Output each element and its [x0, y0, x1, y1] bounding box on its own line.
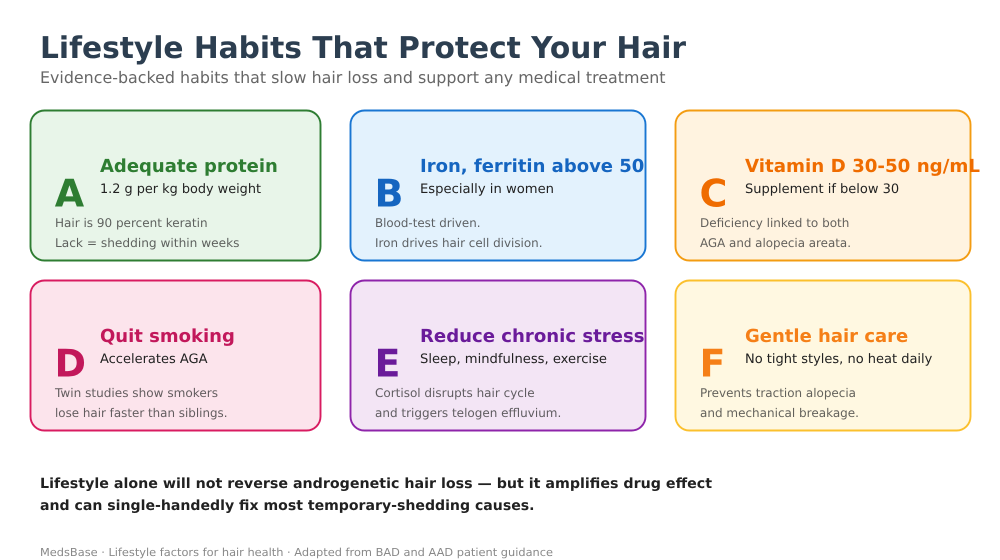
panel: D quit smoking: [30, 280, 320, 430]
panel: E reduce stress: Sleep, mindfulness, exercise: [420, 352, 607, 367]
panel: D quit smoking: Quit smoking: [100, 326, 235, 347]
panel: C vitamin D: AGA and alopecia areata.: [700, 236, 851, 250]
panel: F gentle hair care: [676, 280, 970, 430]
takeaway statement: [40, 476, 712, 514]
takeaway statement: and can single-handedly fix most temporary-shedding causes.: [40, 498, 534, 514]
panel: A adequate protein: [30, 110, 320, 260]
panel: B iron: Especially in women: [420, 182, 554, 197]
panel: A adequate protein: 1.2 g per kg body weight: [100, 182, 261, 197]
panel: E reduce stress: and triggers telogen effluvium.: [375, 406, 561, 420]
panel: E reduce stress: E: [374, 342, 400, 386]
panel: B iron: Iron, ferritin above 50: [420, 156, 644, 177]
panel: F gentle hair care: and mechanical breakage.: [700, 406, 859, 420]
panel: A adequate protein: Lack = shedding within weeks: [55, 236, 240, 250]
takeaway statement: Lifestyle alone will not reverse androgenetic hair loss — but it amplifies drug effect: [40, 476, 712, 492]
panel: E reduce stress: [350, 280, 646, 430]
panel: F gentle hair care: No tight styles, no heat daily: [745, 352, 933, 367]
panel: A adequate protein: A: [55, 172, 85, 216]
panel: C vitamin D: Supplement if below 30: [745, 182, 899, 197]
panel: F gentle hair care: Prevents traction alopecia: [700, 386, 856, 400]
panel: B iron: [350, 110, 646, 260]
subtitle: Evidence-backed habits that slow hair loss and support any medical treatment: [40, 68, 666, 87]
panel: D quit smoking: D: [54, 342, 86, 386]
panel: E reduce stress: Reduce chronic stress: [420, 326, 644, 347]
panel: A adequate protein: Adequate protein: [100, 156, 278, 177]
title: Lifestyle Habits That Protect Your Hair: [40, 31, 686, 66]
panel: B iron: B: [374, 172, 403, 216]
panel: C vitamin D: Deficiency linked to both: [700, 216, 849, 230]
panel: E reduce stress: Cortisol disrupts hair cycle: [375, 386, 535, 400]
panel: D quit smoking: Twin studies show smokers: [54, 386, 218, 400]
panel: C vitamin D: C: [700, 172, 727, 216]
panel: B iron: Blood-test driven.: [375, 216, 480, 230]
panel: D quit smoking: lose hair faster than siblings.: [55, 406, 228, 420]
panel: D quit smoking: Accelerates AGA: [100, 352, 208, 367]
panel: F gentle hair care: F: [700, 342, 725, 386]
panel: F gentle hair care: Gentle hair care: [745, 326, 908, 347]
panel: A adequate protein: Hair is 90 percent keratin: [55, 216, 208, 230]
footer source: MedsBase · Lifestyle factors for hair health · Adapted from BAD and AAD patient guidance: [40, 546, 553, 559]
panel: B iron: Iron drives hair cell division.: [375, 236, 542, 250]
panel: C vitamin D: [676, 110, 980, 260]
panel: C vitamin D: Vitamin D 30-50 ng/mL: [745, 156, 980, 177]
